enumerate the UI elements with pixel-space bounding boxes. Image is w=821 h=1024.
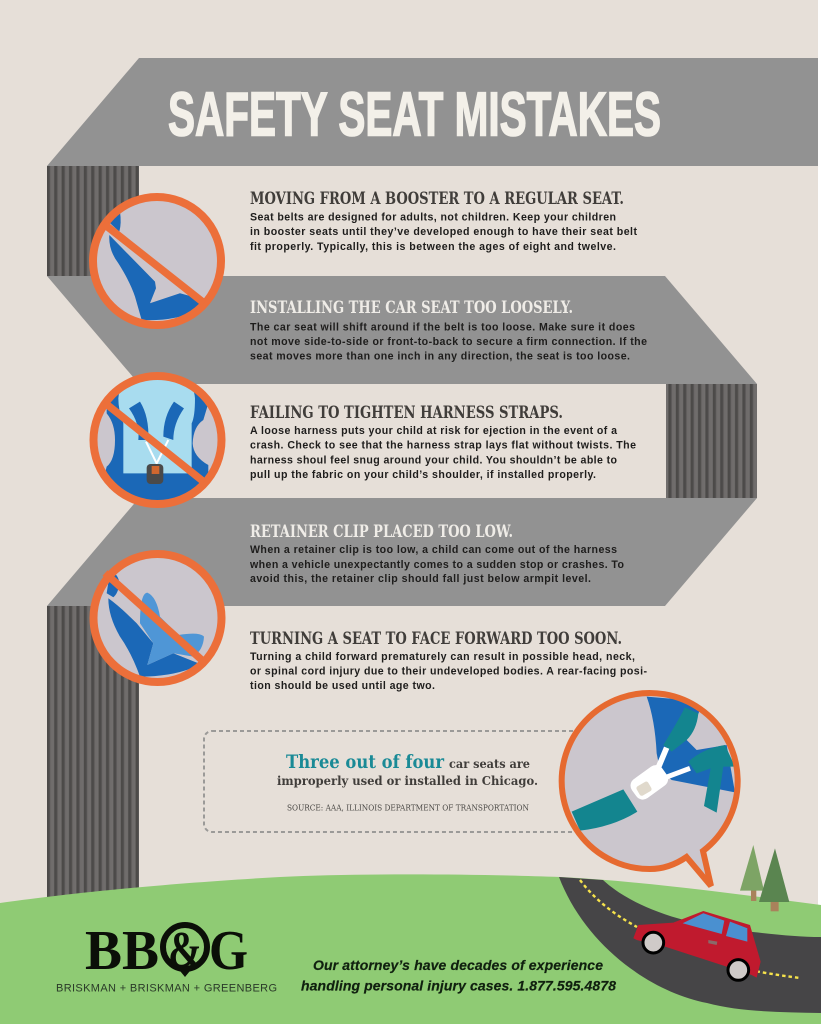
text block: failing to tighten harness: A loose harness puts your child at risk for ejection in the event of a: [250, 425, 617, 437]
text block: moving from a booster: MOVING FROM A BOOSTER TO A REGULAR SEAT.: [250, 188, 624, 208]
text block: installing too loosely: INSTALLING THE CAR SEAT TOO LOOSELY.: [250, 297, 573, 317]
text block: failing to tighten harness: harness shoul feel snug around your child. You shouldn’t be able to: [250, 454, 618, 466]
text block: installing too loosely: not move side-to-side or front-to-back to secure a firm connection. If the: [250, 336, 647, 348]
text block: failing to tighten harness: FAILING TO TIGHTEN HARNESS STRAPS.: [250, 402, 563, 422]
speech bubble: buckle detail: [562, 693, 738, 886]
text block: failing to tighten harness: pull up the fabric on your child’s shoulder, if installed properly.: [250, 469, 596, 481]
text block: installing too loosely: [250, 297, 647, 362]
text block: turning forward too soon: tion should be used until age two.: [250, 680, 435, 692]
trees: [740, 845, 789, 911]
callout: statistic: car seats are: [449, 757, 530, 771]
text block: moving from a booster: in booster seats until they’ve developed enough to have their seat belt: [250, 226, 637, 238]
text block: moving from a booster: [250, 188, 637, 253]
stripes: upper left fold: [47, 166, 139, 276]
logo: BB&G: BB: [85, 920, 159, 982]
text block: moving from a booster: Seat belts are designed for adults, not children. Keep your children: [250, 212, 616, 224]
text block: retainer clip: when a vehicle unexpectantly comes to a sudden stop or crashes. To: [249, 559, 625, 571]
statistic highlight: Three out of four: [286, 752, 444, 773]
stripes: right fold: [666, 384, 757, 498]
icon: retainer seat prohibited: [94, 554, 222, 682]
callout: statistic: [204, 731, 604, 832]
hill: [0, 874, 821, 1024]
text block: retainer clip: [249, 521, 625, 585]
text block: retainer clip: RETAINER CLIP PLACED TOO LOW.: [250, 521, 513, 541]
icon: harness straps prohibited: [94, 373, 222, 504]
text block: turning forward too soon: [250, 628, 647, 692]
text block: installing too loosely: The car seat will shift around if the belt is too loose. Make sure it does: [250, 322, 635, 334]
logo: BB&G: &: [168, 922, 202, 979]
text block: turning forward too soon: or spinal cord injury due to their undeveloped bodies. A rear-facing posi-: [250, 666, 647, 678]
ribbon band 3: [47, 498, 757, 606]
footer message: Our attorney’s have decades of experience: [313, 957, 603, 973]
text block: retainer clip: When a retainer clip is too low, a child can come out of the harness: [250, 544, 617, 556]
ribbon band 2: [47, 276, 757, 384]
text block: turning forward too soon: Turning a child forward prematurely can result in possible head, neck,: [250, 651, 635, 663]
text block: failing to tighten harness: crash. Check to see that the harness strap lays flat without twists. The: [250, 440, 636, 452]
text block: turning forward too soon: TURNING A SEAT TO FACE FORWARD TOO SOON.: [250, 628, 622, 648]
title banner: [47, 58, 818, 166]
icon: booster seat prohibited: [93, 197, 221, 325]
footer message: [301, 957, 616, 994]
logo: BB&G: [56, 920, 277, 994]
text block: installing too loosely: seat moves more than one inch in any direction, the seat is too loose.: [250, 350, 630, 362]
text block: failing to tighten harness: [250, 402, 636, 481]
stripes: lower left fold: [47, 606, 139, 897]
footer message: handling personal injury cases. 1.877.595.4878: [301, 978, 616, 994]
logo: BB&G: G: [209, 920, 248, 982]
callout: statistic: improperly used or installed in Chicago.: [277, 774, 538, 788]
logo tagline: BRISKMAN + BRISKMAN + GREENBERG: [56, 982, 277, 994]
text block: retainer clip: avoid this, the retainer clip should fall just below armpit level.: [250, 573, 591, 585]
text block: moving from a booster: fit properly. Typically, this is between the ages of eight and twelve.: [250, 241, 616, 253]
road: [559, 877, 821, 1013]
car: [633, 911, 761, 980]
callout: statistic: SOURCE: AAA, ILLINOIS DEPARTMENT OF TRANSPORTATION: [287, 804, 529, 812]
